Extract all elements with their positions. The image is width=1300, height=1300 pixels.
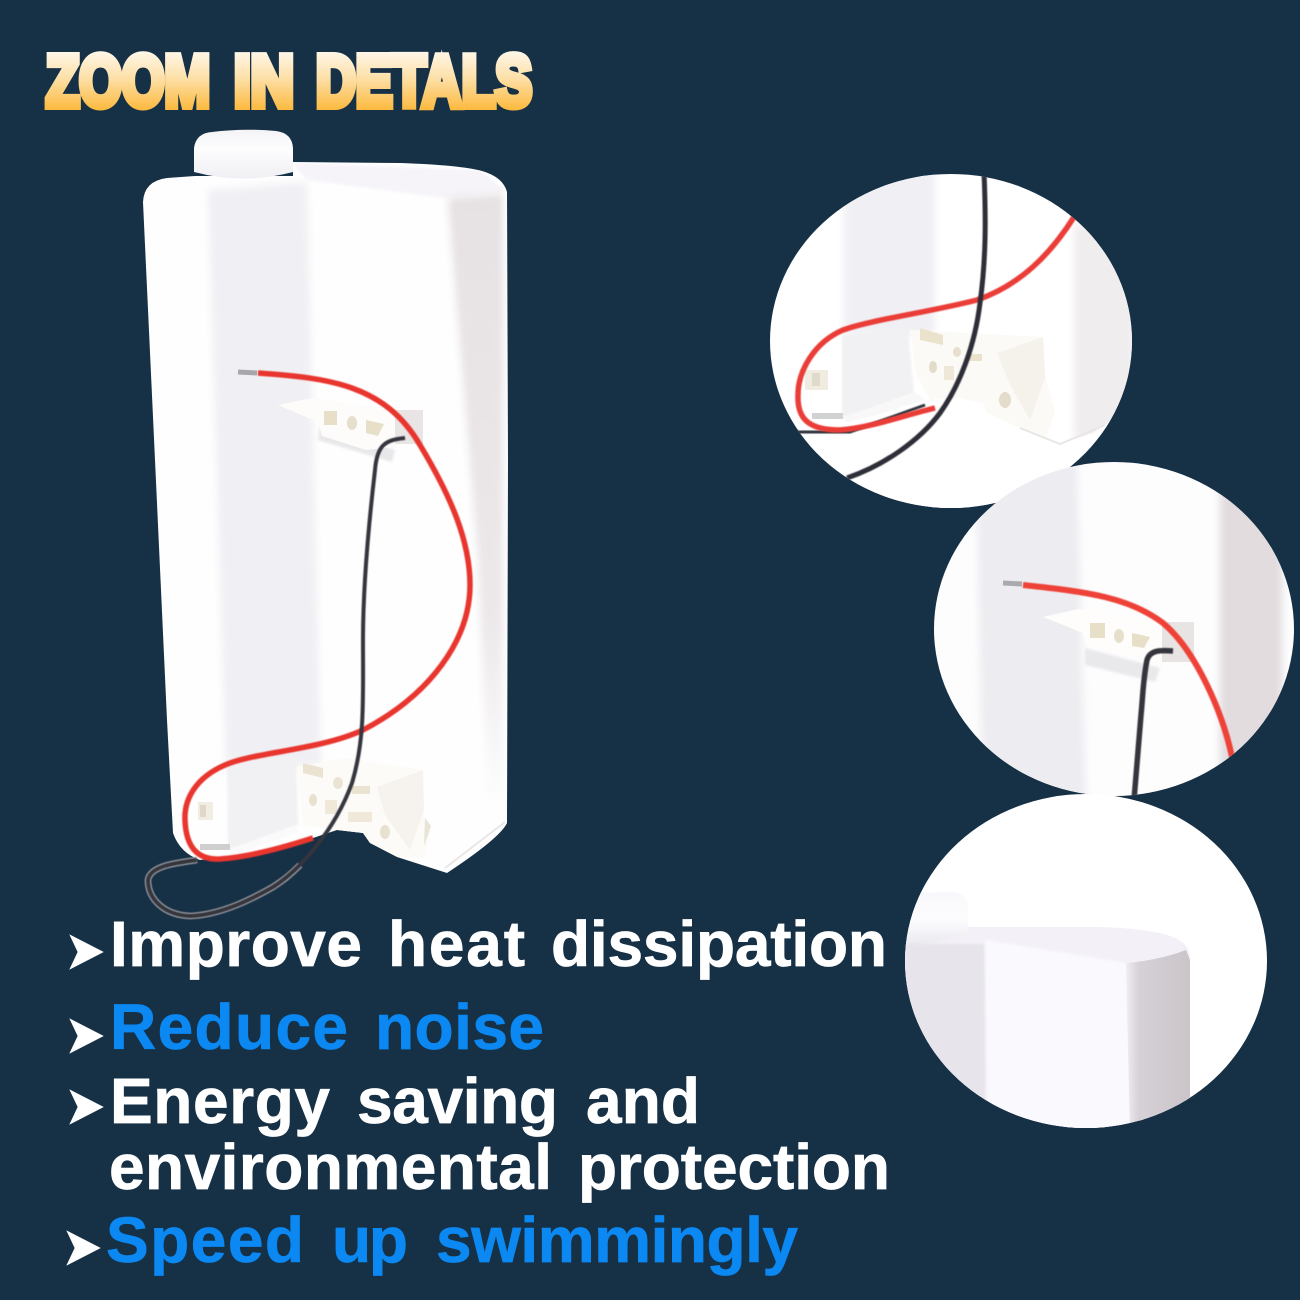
right side face: [1126, 950, 1190, 1130]
bullet 2: noise: [375, 991, 544, 1063]
bullet 3: protection: [578, 1131, 890, 1203]
title: [46, 42, 532, 122]
bullet 3: environmental: [109, 1131, 552, 1203]
title: ZOOM: [46, 42, 210, 122]
bullet 3: [70, 1065, 890, 1203]
bullet 1: heat: [388, 908, 525, 980]
red wire: [185, 373, 470, 859]
arrow icon: [70, 1090, 103, 1124]
black wire: [1134, 651, 1173, 800]
pin: [1003, 583, 1022, 584]
lower recess: [228, 768, 298, 848]
channel shading: [844, 165, 935, 335]
clip: [805, 370, 828, 390]
front face: [985, 940, 1130, 1130]
zoom circle 3: [905, 794, 1267, 1134]
dark under-wire: [798, 405, 925, 432]
arrow icon: [67, 1231, 100, 1265]
plate: [843, 392, 925, 424]
right face: [1074, 225, 1134, 440]
bullet 4: Speed: [106, 1204, 304, 1276]
housing cap: [194, 130, 293, 178]
right face: [1217, 492, 1286, 766]
arrow icon: [70, 935, 103, 969]
connector plate: [278, 398, 395, 450]
housing body: [143, 162, 508, 873]
black wire sleeve: [148, 860, 300, 916]
red wire: [798, 217, 1074, 430]
bullet 4: swimmingly: [436, 1204, 798, 1276]
wire pin: [238, 372, 257, 373]
bullet 4: up: [332, 1204, 408, 1276]
top surface: [296, 164, 507, 196]
right side face: [448, 194, 503, 800]
product photo: white fan housing with wires: [143, 130, 508, 916]
bullet 4: [67, 1204, 798, 1276]
recessed channel: [208, 182, 321, 770]
bullet 2: Reduce: [110, 991, 348, 1063]
title: DETALS: [316, 42, 532, 122]
left clip: [198, 802, 298, 856]
upper connector: [278, 398, 423, 462]
body shading: [208, 163, 507, 868]
housing cap: [905, 892, 968, 945]
bullet 3: Energy: [110, 1065, 330, 1137]
bullet 3: saving: [357, 1065, 558, 1137]
white ground below housing: [800, 420, 1110, 508]
connector plate: [1043, 609, 1162, 664]
lower connector: [297, 758, 431, 858]
connector block: [1160, 622, 1194, 662]
connector shadow: [318, 425, 395, 462]
bottom lip line: [445, 822, 505, 868]
bullet 3: and: [586, 1065, 700, 1137]
black wire: [847, 172, 985, 478]
title: IN: [234, 42, 294, 122]
red wire: [1023, 585, 1232, 757]
channel shading: [976, 455, 1086, 800]
connector shadow: [1085, 648, 1160, 682]
bullet 1: dissipation: [551, 908, 887, 980]
housing top surface: [905, 927, 1190, 1130]
connector block: [393, 410, 423, 444]
housing lip: [1020, 425, 1105, 444]
recess: [842, 336, 914, 417]
bullet 2: [70, 991, 544, 1063]
left channel: [905, 944, 984, 1100]
black wire: [148, 438, 405, 916]
arrow icon: [70, 1019, 103, 1053]
connector block: [377, 770, 424, 850]
connector: [910, 330, 1055, 440]
zoom circle 2: [934, 455, 1294, 800]
bullet 1: [70, 908, 887, 980]
zoom circle 1: [770, 165, 1134, 520]
bullet 1: Improve: [110, 908, 362, 980]
